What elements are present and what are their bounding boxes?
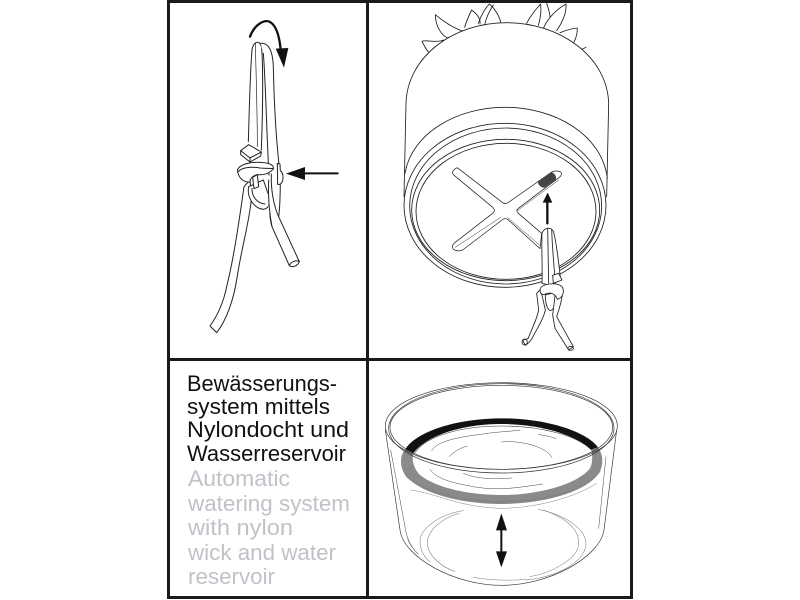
icon: wick with knot — [522, 228, 573, 350]
icon: black water ring back — [405, 418, 598, 453]
text block: English title: wick and water — [187, 540, 336, 565]
icon: glass rim — [385, 383, 617, 473]
heading: German title: system mittels — [187, 394, 330, 419]
frame and panel dividers — [168, 1, 632, 598]
text block: English title — [187, 466, 350, 589]
heading: German title: Nylondocht und — [187, 417, 349, 442]
icon: water ripples — [406, 426, 600, 508]
icon: bowl base ellipses — [407, 509, 586, 580]
icon: glass bowl outline — [385, 430, 617, 585]
heading: German title — [187, 371, 349, 466]
text block: English title: Automatic — [188, 466, 290, 491]
panel: glass reservoir — [385, 383, 617, 585]
heading: German title: Wasserreservoir — [187, 441, 346, 466]
icon: looped nylon wick with knot — [210, 42, 299, 333]
text block: English title: watering system — [187, 491, 350, 516]
heading: German title: Bewässerungs- — [187, 371, 337, 396]
icon: dark wick in slot — [538, 172, 556, 188]
arrow: pointing to knot — [286, 167, 338, 180]
text block: English title: with nylon — [187, 515, 293, 540]
panel: knot tying — [210, 21, 338, 333]
icon: grey water ring front — [401, 447, 602, 504]
arrow: upward wick arrow — [543, 193, 552, 223]
arrow: double-headed level arrow — [496, 513, 507, 567]
icon: plant leaves — [422, 3, 586, 53]
text block: English title: reservoir — [188, 564, 275, 589]
arrow: curved turning arrow — [250, 21, 288, 68]
icon: cross-shaped slot — [452, 168, 561, 251]
icon: pot base rims — [404, 107, 607, 287]
panel: pot underside — [404, 3, 609, 350]
icon: pot body — [404, 23, 609, 197]
